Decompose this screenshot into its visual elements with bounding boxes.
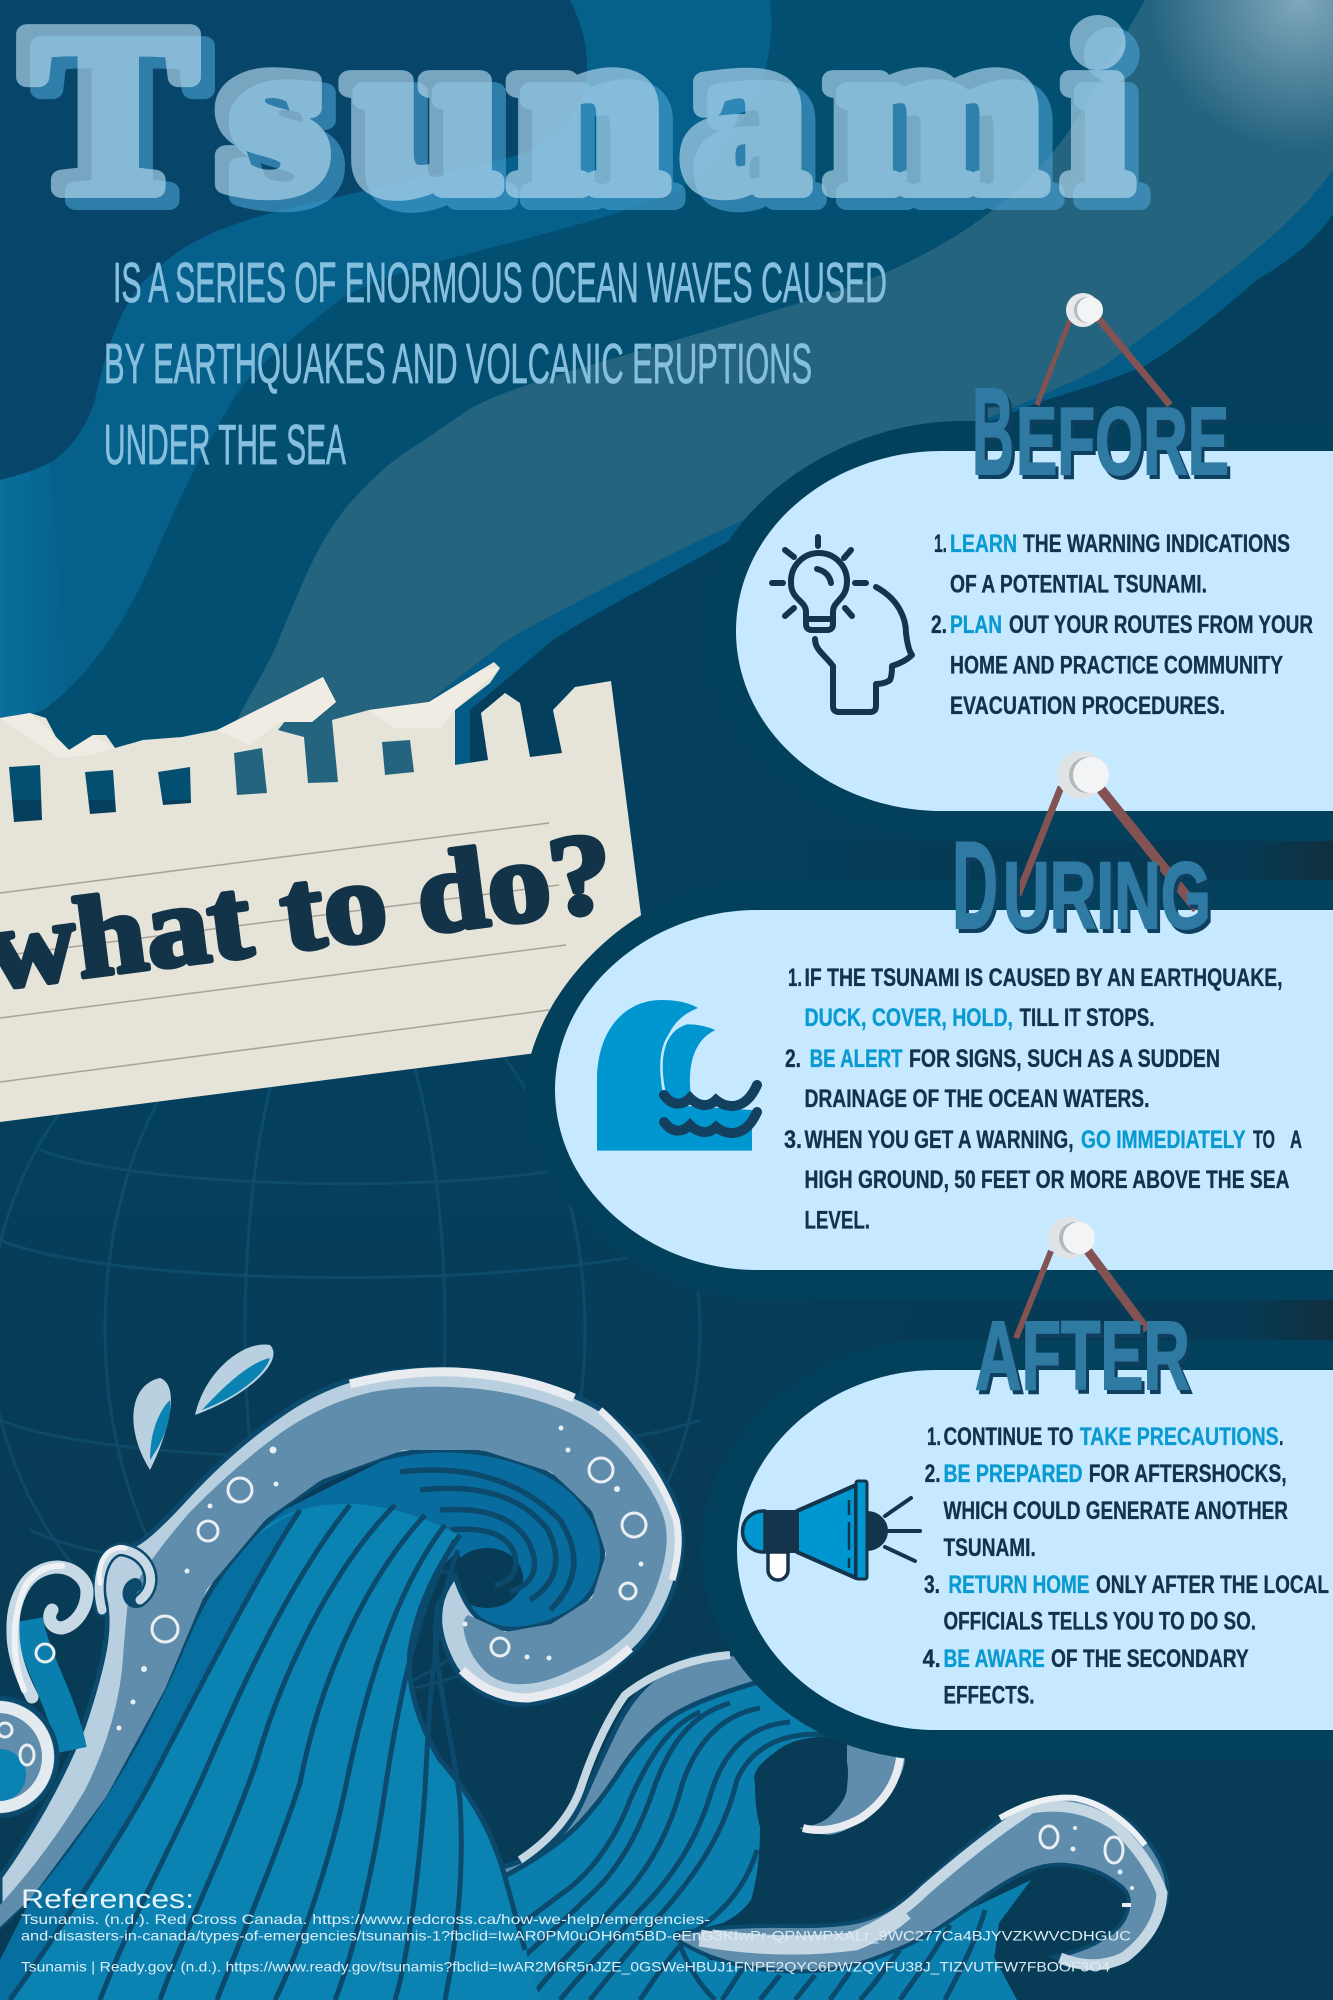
heading: during: URING: [1003, 843, 1211, 949]
text: during list: GO IMMEDIATELY: [1081, 1126, 1246, 1154]
icon: megaphone: [742, 1481, 920, 1580]
bubbles on crest: [152, 1458, 646, 1656]
text: before list: 2.: [931, 611, 947, 639]
text: after list: 3.: [924, 1571, 940, 1599]
text: after list: EFFECTS.: [944, 1682, 1034, 1710]
torn notebook paper: [0, 662, 660, 1122]
third wave crest: [677, 1797, 1168, 1971]
text: after list: TSUNAMI.: [944, 1534, 1036, 1562]
text: after list: BE AWARE: [944, 1645, 1045, 1673]
text: during list: [784, 964, 1302, 1235]
text: before list: LEARN: [950, 530, 1017, 558]
illustration: left curl and bubble: [0, 1566, 87, 1816]
subtitle text: [104, 251, 887, 477]
text: during list: TILL IT STOPS.: [1020, 1004, 1154, 1032]
illustration: back waves: [480, 1654, 1168, 2000]
text: after list: 4.: [923, 1645, 941, 1673]
text: before list: EVACUATION PROCEDURES.: [950, 692, 1225, 720]
references: [21, 1884, 1131, 1975]
panel: before background: [736, 451, 1333, 811]
references: Tsunamis. (n.d.). Red Cross Canada. https://www.redcross.ca/how-we-help/emergencies-: [21, 1911, 710, 1927]
title: [23, 0, 1144, 251]
text: before list: 1.: [934, 530, 947, 558]
heading: during: [952, 817, 1211, 955]
text: after list: CONTINUE TO: [944, 1423, 1074, 1451]
heading: after: AFTER: [975, 1301, 1190, 1410]
panel: during background: [555, 910, 1333, 1270]
icon: tsunami wave: [597, 1000, 757, 1151]
text: during list: TO: [1253, 1126, 1275, 1154]
hanging pin and strings: before: [1037, 293, 1170, 405]
text: during list: WHEN YOU GET A WARNING,: [804, 1126, 1074, 1154]
hanging pin and strings: after: [1016, 1217, 1147, 1338]
text: during list: DUCK, COVER, HOLD,: [804, 1004, 1013, 1032]
hanging pin and strings: during: [1018, 751, 1197, 909]
text: during list: LEVEL.: [804, 1207, 870, 1235]
icon: water droplets: [133, 1344, 273, 1470]
references: Tsunamis | Ready.gov. (n.d.). https://www.ready.gov/tsunamis?fbclid=IwAR2M6R5nJZE_0GSWeHBUJ1FNPE2QYC6DWZQVFU38J_TIZVUTFW7FBOOF3O4: [21, 1959, 1110, 1975]
panel: after background: [737, 1370, 1333, 1730]
text: during list: 3.: [784, 1126, 802, 1154]
text: during list: 1.: [788, 964, 802, 992]
heading: before: [972, 364, 1229, 501]
text: after list: .: [1279, 1423, 1284, 1451]
subtitle text: UNDER THE SEA: [104, 413, 346, 477]
text: after list: OF THE SECONDARY: [1051, 1645, 1249, 1673]
wave crest band: [0, 1369, 682, 1927]
references: References:: [21, 1884, 194, 1914]
text: after list: 2.: [925, 1460, 941, 1488]
references: and-disasters-in-canada/types-of-emergencies/tsunamis-1?fbclid=IwAR0PM0uOH6m5BD-eEnG3KIwPr-QPNWPXALr_9WC277Ca4BJYVZKWVCDHGUC: [21, 1928, 1131, 1944]
text: during list: A: [1290, 1126, 1302, 1154]
text: during list: FOR SIGNS, SUCH AS A SUDDEN: [909, 1045, 1220, 1073]
text: during list: BE ALERT: [810, 1045, 903, 1073]
text: after list: TAKE PRECAUTIONS: [1080, 1423, 1279, 1451]
text: after list: 1.: [927, 1423, 941, 1451]
text: before list: [931, 530, 1313, 720]
second wave lip: [799, 1743, 905, 1835]
second wave crest: [489, 1654, 800, 1875]
text: before list: PLAN: [950, 611, 1002, 639]
text: after list: BE PREPARED: [944, 1460, 1082, 1488]
heading: before: B: [972, 364, 1014, 501]
text: after list: RETURN HOME: [948, 1571, 1089, 1599]
text: during list: DRAINAGE OF THE OCEAN WATERS.: [804, 1085, 1150, 1113]
text: before list: OF A POTENTIAL TSUNAMI.: [950, 570, 1207, 598]
illustration: big curling wave: [0, 1369, 682, 2000]
heading: during: D: [952, 817, 998, 955]
icon: light bulb and head: [772, 537, 912, 712]
crest curl: [99, 1549, 151, 1610]
text: after list: [923, 1423, 1329, 1710]
text: during list: 2.: [785, 1045, 801, 1073]
globe outline behind waves: [0, 965, 700, 1695]
panel halos: [525, 421, 1333, 1760]
